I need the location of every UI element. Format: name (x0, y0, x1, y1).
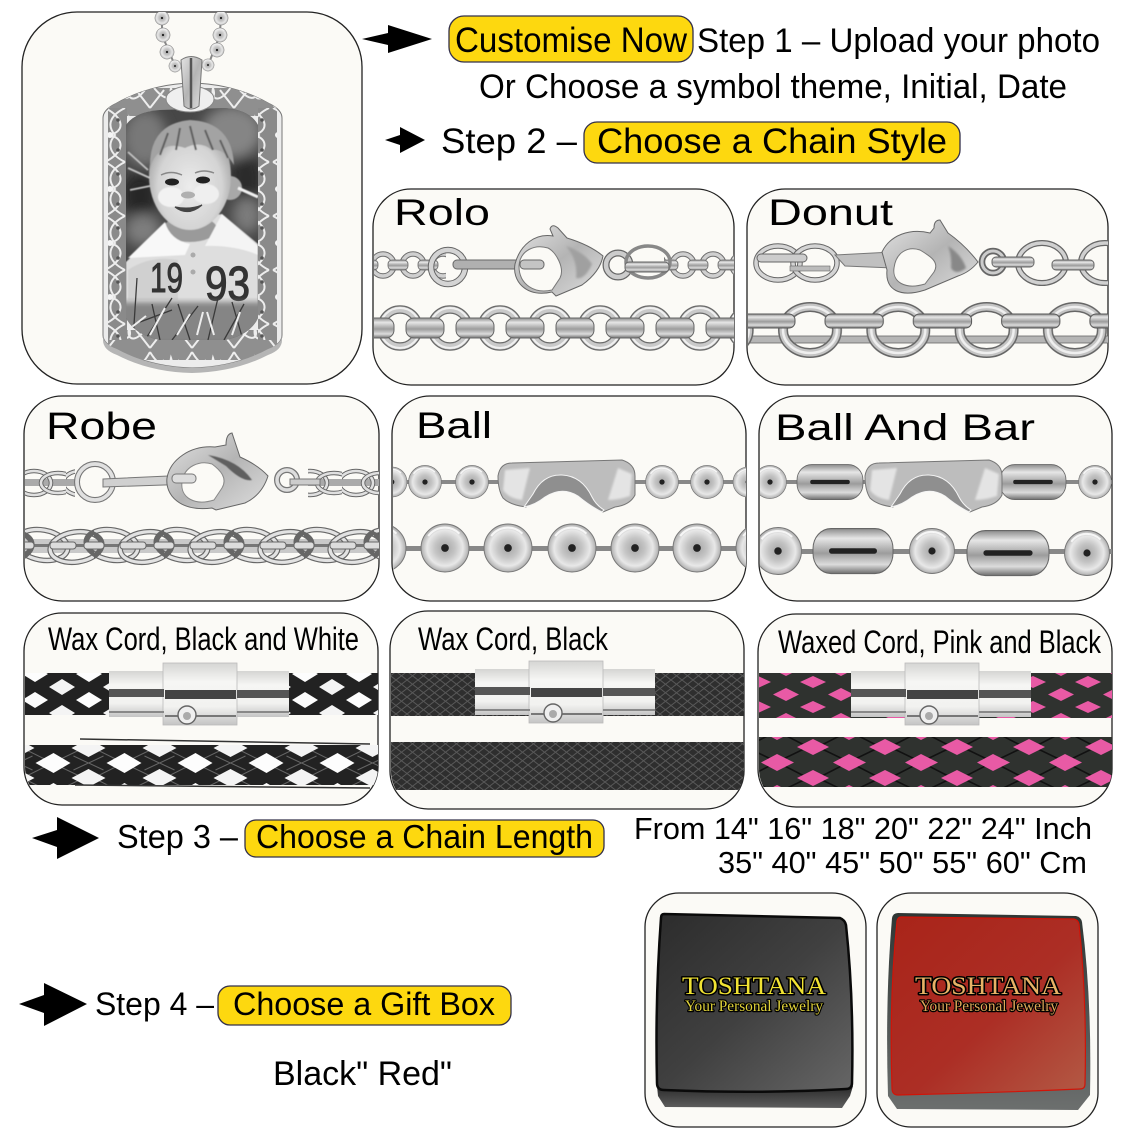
heading: Wax Cord, Black and White: Wax Cord, Black and White (48, 621, 359, 657)
jersey numbers: 93 (205, 258, 250, 311)
brand text (682, 973, 826, 1015)
button: Customise Now: Customise Now (455, 21, 688, 60)
black cords with clasp (391, 661, 744, 790)
lower Ball And Bar chain (754, 528, 1112, 576)
panel: red gift box (877, 893, 1098, 1127)
upper Ball And Bar chain with clasp (754, 460, 1112, 512)
text: step 3: Step 3 – (117, 818, 239, 855)
text: step 4: Step 4 – (95, 986, 214, 1022)
brand text: TOSHTANA (682, 973, 826, 1000)
arrow: step 1 (362, 25, 432, 53)
panel: Ball chain (391, 395, 747, 602)
upper Donut chain with clasp (756, 220, 1129, 293)
lower Rolo chain (374, 303, 734, 353)
upper Ball chain with clasp (377, 460, 763, 512)
heading: Robe: Robe (46, 406, 157, 448)
panel: Wax Cord, Black and White (24, 613, 378, 805)
text: lengths in inches: From 14" 16" 18" 20" 22" 24" Inch (634, 811, 1092, 846)
heading: Rolo: Rolo (394, 192, 490, 233)
lower Donut chain (748, 300, 1108, 360)
button: Choose a Chain Length: Choose a Chain Length (256, 818, 593, 855)
heading: Ball: Ball (416, 405, 492, 446)
heading: Ball And Bar: Ball And Bar (775, 407, 1035, 448)
text: gift box colours: Black" Red" (273, 1055, 452, 1093)
text: step 1 options: Or Choose a symbol theme, Initial, Date (479, 68, 1067, 106)
button: Choose a Gift Box: Choose a Gift Box (233, 986, 495, 1022)
button: Choose a Chain Style: Choose a Chain Style (597, 122, 947, 161)
panel: Waxed Cord, Pink and Black (758, 614, 1112, 807)
heading: Wax Cord, Black: Wax Cord, Black (418, 621, 609, 657)
arrow: step 2 (385, 127, 425, 153)
box base (657, 1086, 853, 1108)
grass (126, 278, 258, 340)
jersey numbers (152, 262, 249, 302)
text: step 2: Step 2 – (441, 122, 578, 161)
brand text: Your Personal Jewelry (685, 998, 823, 1015)
text: lengths in centimetres: 35" 40" 45" 50" 55" 60" Cm (718, 845, 1087, 880)
arrow: step 4 (19, 983, 87, 1026)
jersey numbers: 19 (150, 254, 183, 301)
box lid (891, 917, 1085, 1095)
baby face features (161, 171, 214, 274)
box lid (656, 914, 852, 1092)
engraved baby photo (126, 108, 258, 340)
panel: Robe chain (24, 396, 379, 601)
ball chain of pendant (155, 10, 228, 72)
arrow: step 3 (32, 817, 99, 859)
upper Rolo chain with clasp (374, 226, 734, 296)
brand text: TOSHTANA (915, 973, 1061, 1000)
lower Robe chain (25, 525, 379, 567)
panel: Donut chain (747, 189, 1129, 385)
pendant tag with filigree border (103, 83, 282, 373)
upper Robe chain with clasp (25, 433, 379, 510)
heading: Donut: Donut (768, 192, 894, 233)
panel: Ball And Bar chain (754, 396, 1112, 601)
lower Ball chain (393, 524, 746, 572)
brand text (915, 973, 1061, 1015)
black and white cords with clasp (25, 663, 378, 788)
panel: photo pendant (22, 10, 362, 384)
box base and shell (887, 913, 1090, 1110)
brand text: Your Personal Jewelry (920, 998, 1058, 1015)
panel: black gift box (645, 893, 866, 1127)
pendant bail (166, 56, 214, 112)
text: step 1: Step 1 – Upload your photo (697, 22, 1100, 60)
panel: Wax Cord, Black (390, 611, 744, 809)
panel: Rolo chain (373, 189, 734, 385)
pink and black cords with clasp (759, 663, 1112, 787)
